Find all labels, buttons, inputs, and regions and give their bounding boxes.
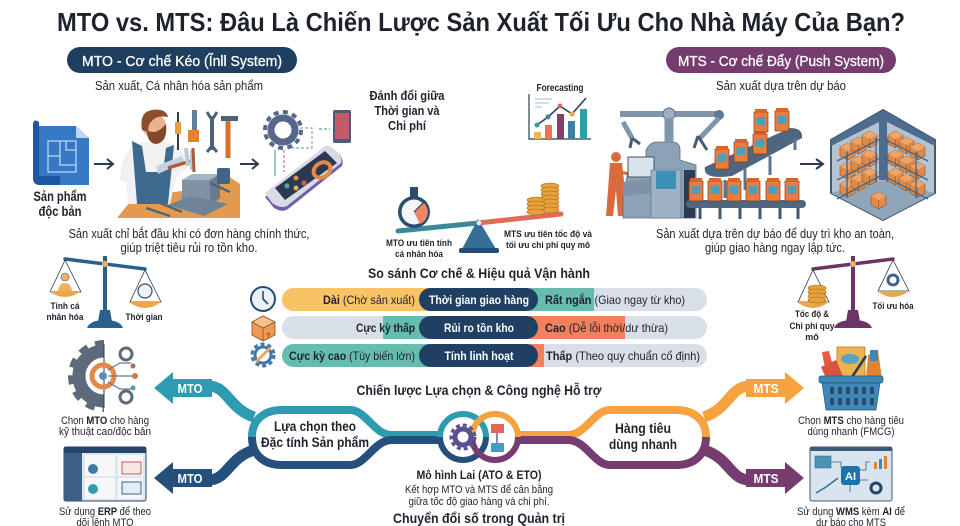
row: inventory risk: Rủi ro tồn kho [444, 321, 514, 335]
MTO description [68, 226, 310, 255]
left balance scale: nhân hóa [46, 312, 84, 322]
icon: craftsman at workbench [117, 110, 240, 218]
hybrid model text: giữa tốc độ giao hàng và chi phí. [408, 496, 550, 508]
right balance scale [790, 256, 914, 342]
comparison heading: So sánh Cơ chế & Hiệu quả Vận hành [368, 266, 590, 281]
MTO product choice text: Chọn MTO cho hàng [61, 415, 149, 427]
right balance scale: mô [805, 332, 819, 342]
row: flexibility: Thấp (Theo quy chuẩn cố định) [546, 349, 700, 363]
row: inventory risk: Cao (Dễ lỗi thời/dư thừa) [545, 320, 668, 335]
icon: forecasting chart: Forecasting [536, 83, 584, 94]
MTO product choice text: kỹ thuật cao/độc bản [59, 426, 151, 438]
MTS description: giúp giao hàng ngay lập tức. [705, 240, 845, 255]
MTS description: Sản xuất dựa trên dự báo để duy trì kho an toàn, [656, 226, 894, 241]
MTS subtitle: Sản xuất dựa trên dự báo [716, 78, 846, 93]
WMS text: Sử dụng WMS kèm AI để [797, 506, 905, 518]
hybrid model text: Kết hợp MTO và MTS để cân bằng [405, 483, 553, 496]
icon: hybrid gear [451, 425, 475, 449]
right balance scale: Tối ưu hóa [872, 301, 914, 311]
row: delivery time: Thời gian giao hàng [429, 293, 529, 307]
icon: hybrid flow [491, 424, 504, 452]
row: flexibility [282, 344, 707, 367]
MTO product choice text [59, 415, 151, 438]
icon: flexibility gear [252, 344, 274, 366]
seesaw labels: tối ưu chi phí quy mô [506, 240, 590, 251]
strategy heading: Chiến lược Lựa chọn & Công nghệ Hỗ trợ [356, 383, 602, 398]
MTS product choice text: dùng nhanh (FMCG) [808, 426, 894, 438]
row: delivery time: Rất ngắn (Giao ngay từ kho) [545, 292, 685, 307]
seesaw labels: MTO ưu tiên tính [386, 238, 452, 249]
blueprint label: độc bản [38, 204, 82, 219]
right balance scale: Chi phí quy [790, 321, 834, 331]
row: delivery time [282, 288, 707, 311]
icon: shopping basket [819, 347, 883, 410]
left balance scale [46, 256, 162, 328]
row: flexibility: Cực kỳ cao (Tùy biến lớn) [289, 349, 415, 363]
ERP text: Sử dụng ERP để theo [59, 506, 151, 518]
arrow: conveyor to warehouse [800, 159, 823, 169]
icon: AI dashboard [810, 447, 892, 501]
flow: MTO arrows and product capsule [154, 372, 445, 494]
MTS product choice text [798, 415, 904, 438]
ERP text [59, 506, 151, 526]
flow: MTO arrows and product capsule: Đặc tính Sản phẩm [261, 435, 369, 450]
trade-off heading: Đánh đổi giữa [370, 88, 445, 103]
icon: conveyor belts with products [686, 108, 806, 219]
icon: AI dashboard: AI [845, 471, 856, 483]
MTS product choice text: Chọn MTS cho hàng tiêu [798, 415, 904, 427]
blueprint label: Sản phẩm [34, 189, 86, 204]
MTO description: giúp triệt tiêu rủi ro tồn kho. [120, 240, 258, 255]
flow: MTS arrows and FMCG capsule: Hàng tiêu [615, 421, 671, 436]
flow: MTS arrows and FMCG capsule [515, 372, 804, 494]
seesaw labels: MTS ưu tiên tốc độ và [504, 229, 593, 240]
row: inventory risk [282, 316, 707, 339]
arrow: blueprint to worker [94, 159, 113, 169]
left balance scale: Tính cá [50, 301, 80, 311]
right balance scale: Tốc độ & [795, 309, 829, 319]
icon: blueprint [33, 121, 89, 185]
icon: risk box: ? [266, 333, 270, 340]
digital transformation heading: Chuyển đổi số trong Quản trị [393, 511, 565, 526]
trade-off heading [370, 88, 445, 133]
trade-off heading: Chi phí [388, 118, 426, 133]
seesaw labels: cá nhân hóa [395, 249, 444, 260]
icon: robot machine [620, 108, 724, 218]
WMS text [797, 506, 905, 526]
icon: clock [251, 287, 275, 311]
icon: ERP dashboard [64, 447, 146, 501]
hybrid model text: Mô hình Lai (ATO & ETO) [416, 468, 542, 482]
icon: risk box [252, 316, 275, 341]
hybrid model circles [440, 414, 518, 460]
flow: MTS arrows and FMCG capsule: dùng nhanh [609, 437, 677, 452]
row: delivery time: Dài (Chờ sản xuất) [323, 293, 415, 307]
seesaw: time vs cost [386, 183, 593, 260]
icon: warehouse [831, 110, 935, 220]
flow: MTS arrows and FMCG capsule: MTS [754, 471, 779, 486]
icon: gear circuit [71, 343, 138, 409]
flow: MTS arrows and FMCG capsule: MTS [754, 381, 779, 396]
flow: MTO arrows and product capsule: Lựa chọn theo [274, 419, 356, 434]
seesaw labels [386, 229, 593, 260]
icon: worker at machine [606, 152, 634, 216]
flow: MTO arrows and product capsule: MTO [178, 381, 202, 396]
flow: MTO arrows and product capsule: MTO [178, 471, 202, 486]
arrow: worker to product [240, 159, 258, 169]
MTS description [656, 226, 894, 255]
coins [527, 183, 559, 215]
MTO subtitle: Sản xuất, Cá nhân hóa sản phẩm [95, 78, 263, 93]
icon: forecasting chart [529, 83, 591, 139]
hybrid model text [405, 468, 553, 508]
row: flexibility: Tính linh hoạt [444, 349, 514, 363]
panel: MTO header [67, 47, 297, 73]
title: MTO vs. MTS: Đâu Là Chiến Lược Sản Xuất Tối Ưu Cho Nhà Máy Của Bạn? [57, 7, 905, 37]
blueprint label [34, 189, 86, 219]
icon: gear and phone [265, 110, 351, 211]
left balance scale: Thời gian [126, 312, 162, 322]
MTO description: Sản xuất chỉ bắt đầu khi có đơn hàng chính thức, [68, 226, 310, 241]
row: inventory risk: Cực kỳ thấp [356, 321, 415, 335]
panel: MTS header: MTS - Cơ chế Đẩy (Push System) [678, 54, 884, 70]
stopwatch [398, 187, 430, 228]
panel: MTS header [666, 47, 896, 73]
panel: MTO header: MTO - Cơ chế Kéo (Ĩnll System) [82, 53, 282, 70]
trade-off heading: Thời gian và [374, 103, 440, 118]
